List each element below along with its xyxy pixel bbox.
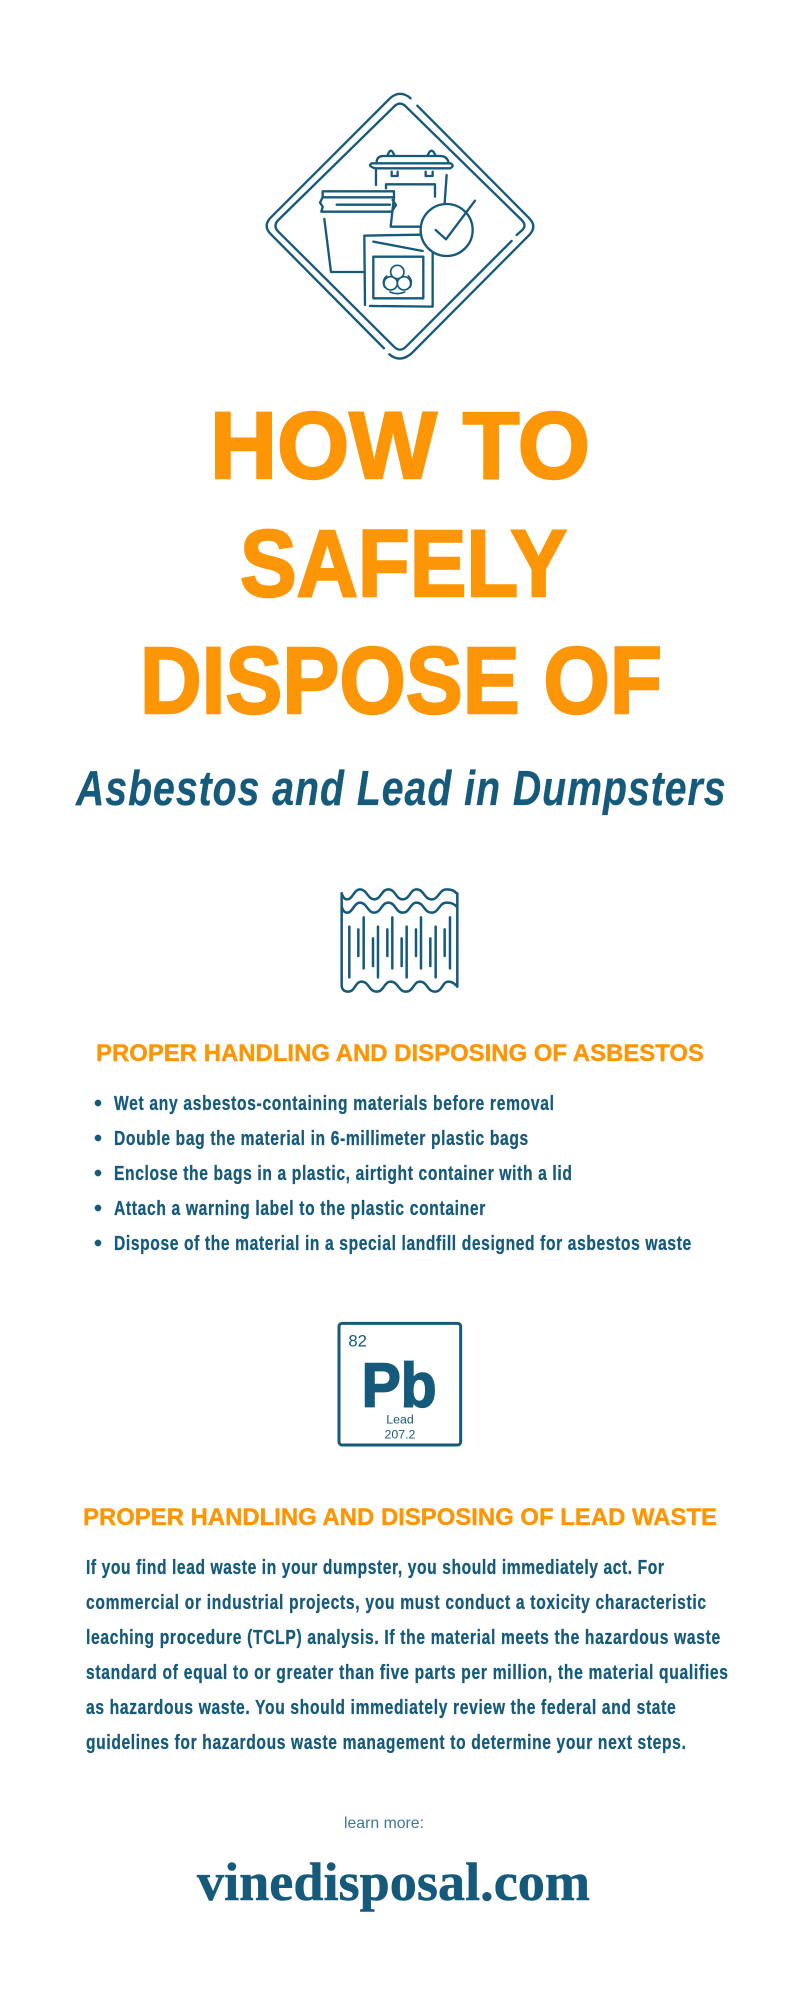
- paragraph: lead waste: standard of equal to or greater than five parts per million, the material qualifies: [86, 1661, 728, 1683]
- icon: lead periodic table tile: Pb: [362, 1352, 437, 1421]
- icon: lead periodic table tile: [339, 1323, 461, 1445]
- icon: corrugated asbestos sheet: [342, 889, 457, 992]
- paragraph: lead waste: If you find lead waste in your dumpster, you should immediately act. For: [86, 1556, 664, 1578]
- heading: lead waste: PROPER HANDLING AND DISPOSING OF LEAD WASTE: [83, 1504, 717, 1531]
- paragraph: lead waste: as hazardous waste. You should immediately review the federal and state: [86, 1696, 676, 1718]
- learn more label: learn more:: [344, 1815, 424, 1832]
- icon: warning diamond with waste containers and biohazard box: [267, 94, 533, 359]
- bullet list: asbestos steps: Double bag the material in 6-millimeter plastic bags: [114, 1127, 528, 1149]
- subtitle: Asbestos and Lead in Dumpsters: [75, 762, 726, 816]
- title: SAFELY: [240, 511, 567, 617]
- title: DISPOSE OF: [140, 628, 662, 734]
- paragraph: lead waste: guidelines for hazardous waste management to determine your next steps.: [86, 1731, 686, 1753]
- bullet list: asbestos steps: Dispose of the material in a special landfill designed for asbestos waste: [114, 1232, 691, 1254]
- paragraph: lead waste: leaching procedure (TCLP) analysis. If the material meets the hazardous waste: [86, 1626, 720, 1648]
- title: [140, 393, 662, 734]
- heading: asbestos: PROPER HANDLING AND DISPOSING OF ASBESTOS: [96, 1040, 704, 1067]
- paragraph: lead waste: [86, 1556, 728, 1753]
- bullet list: asbestos steps: Attach a warning label to the plastic container: [114, 1197, 485, 1219]
- paragraph: lead waste: commercial or industrial projects, you must conduct a toxicity characteristic: [86, 1591, 706, 1613]
- website url: vinedisposal.com: [197, 1852, 590, 1912]
- icon: lead periodic table tile: Lead: [386, 1412, 414, 1426]
- icon: lead periodic table tile: 207.2: [385, 1427, 416, 1441]
- icon: lead periodic table tile: 82: [348, 1332, 367, 1351]
- bullet list: asbestos steps: Enclose the bags in a plastic, airtight container with a lid: [114, 1162, 572, 1184]
- title: HOW TO: [210, 393, 590, 499]
- bullet list: asbestos steps: [95, 1092, 691, 1254]
- bullet list: asbestos steps: Wet any asbestos-containing materials before removal: [114, 1092, 554, 1114]
